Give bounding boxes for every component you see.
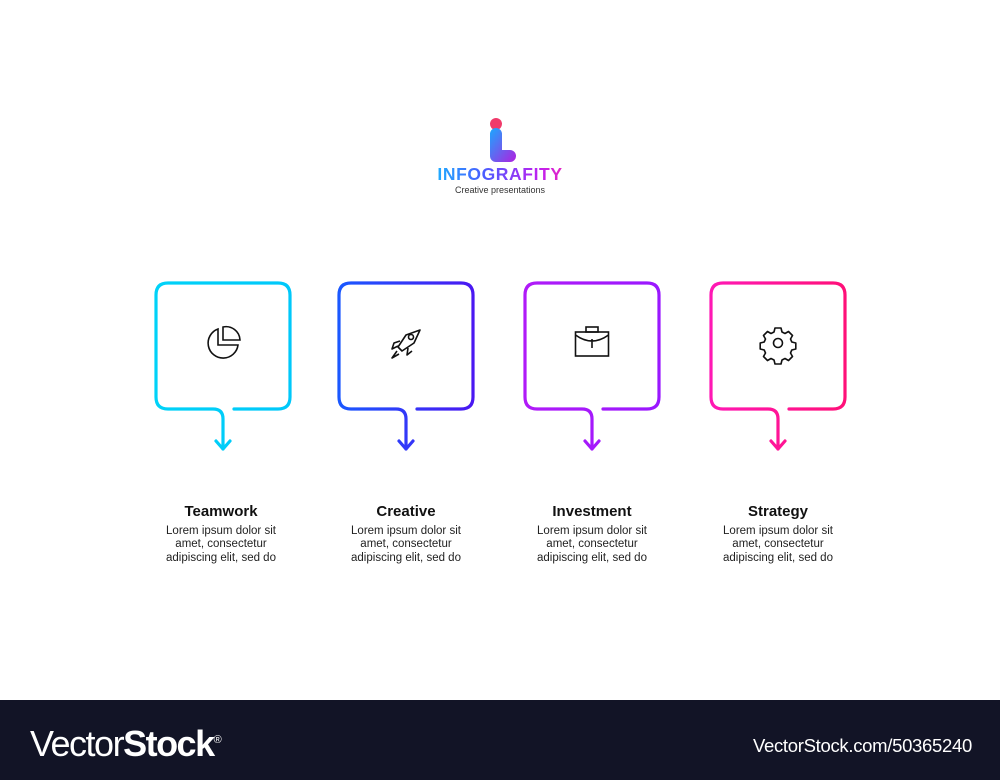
text: teamwork: adipiscing elit, sed do	[166, 552, 276, 564]
footer url: VectorStock.com/50365240	[753, 735, 972, 756]
text: investment: Lorem ipsum dolor sit	[537, 525, 647, 537]
text: strategy: amet, consectetur	[732, 538, 824, 550]
text: creative: Lorem ipsum dolor sit	[351, 525, 461, 537]
text: strategy: Strategy	[748, 503, 808, 520]
icon: gear	[760, 328, 796, 364]
footer bar	[0, 700, 1000, 780]
box 3: investment	[525, 283, 659, 449]
text: investment: amet, consectetur	[546, 538, 638, 550]
box 4: strategy	[711, 283, 845, 449]
text: teamwork: Teamwork	[184, 503, 258, 520]
text: teamwork: Lorem ipsum dolor sit	[166, 525, 276, 537]
logo: INFOGRAFITY	[437, 164, 563, 184]
text: investment: adipiscing elit, sed do	[537, 552, 647, 564]
box 1: teamwork	[156, 283, 290, 449]
icon: rocket	[392, 330, 420, 358]
text: strategy	[723, 503, 833, 564]
text: creative: amet, consectetur	[360, 538, 452, 550]
logo: Creative presentations	[455, 185, 545, 195]
text: creative: adipiscing elit, sed do	[351, 552, 461, 564]
logo	[437, 118, 563, 195]
box 2: creative	[339, 283, 473, 449]
text: investment	[537, 503, 647, 564]
text: strategy: adipiscing elit, sed do	[723, 552, 833, 564]
icon: briefcase	[576, 327, 608, 356]
footer logo: VectorStock®	[30, 723, 220, 764]
text: teamwork	[166, 503, 276, 564]
text: strategy: Lorem ipsum dolor sit	[723, 525, 833, 537]
text: creative: Creative	[376, 503, 436, 520]
diagram boxes	[154, 281, 847, 451]
text: investment: Investment	[552, 503, 632, 520]
text: teamwork: amet, consectetur	[175, 538, 267, 550]
text: creative	[351, 503, 461, 564]
icon: pie chart	[208, 327, 240, 358]
